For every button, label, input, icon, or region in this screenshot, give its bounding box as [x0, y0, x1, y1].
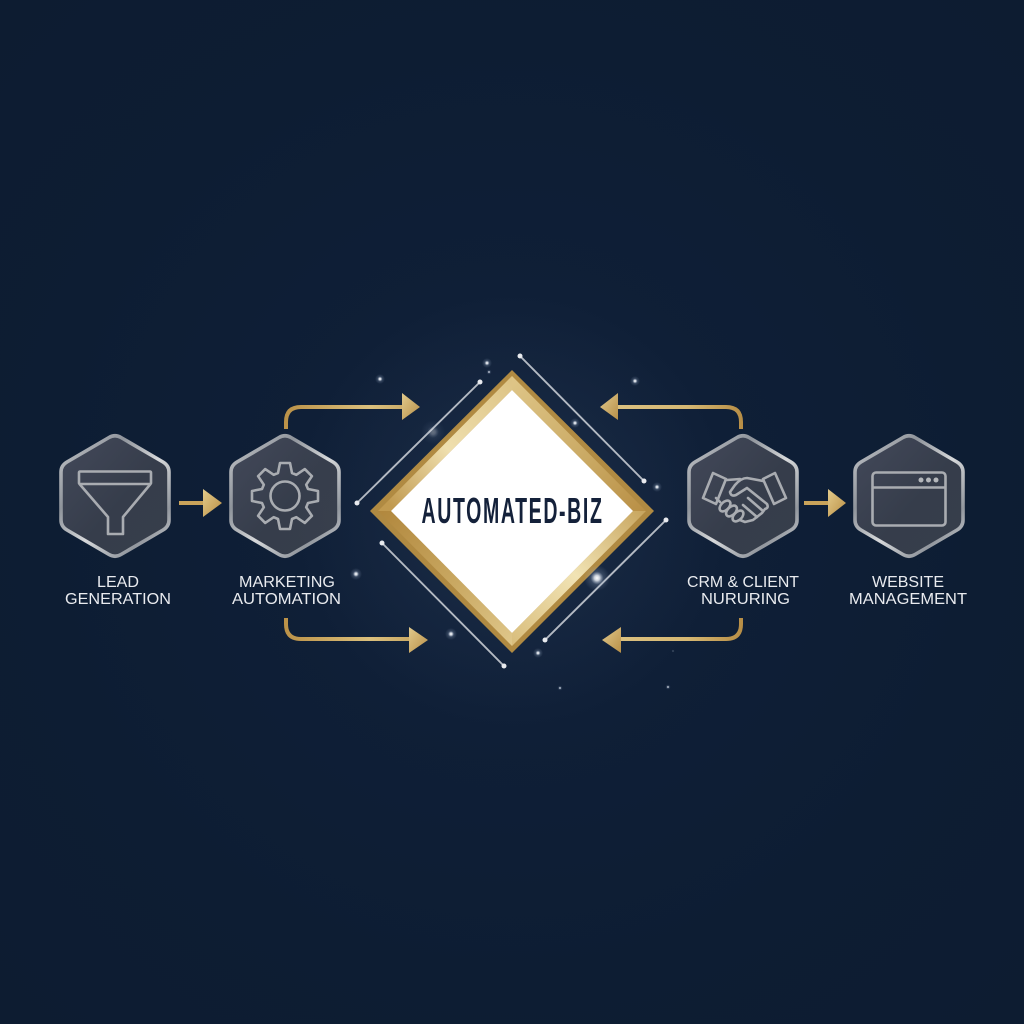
label: marketing automation: [232, 574, 341, 608]
title: AUTOMATED-BIZ: [422, 490, 604, 531]
sparkles: [350, 358, 674, 690]
diamond gold band: south-west: [378, 511, 512, 646]
arrow: crm to diamond, bottom: [602, 618, 741, 653]
step: website management: [849, 436, 967, 608]
icon: funnel: [79, 472, 151, 534]
diamond gold band: north-east: [512, 376, 646, 511]
diamond white face: [391, 390, 633, 633]
arrow: crm to website: [804, 489, 846, 517]
hexagon: lead generation: [61, 436, 169, 556]
connector lines around diamond: [354, 354, 668, 668]
step: marketing automation: [231, 436, 341, 608]
label: crm and client nurturing: NURURING: [701, 591, 790, 608]
hexagon: website: [855, 436, 963, 556]
diamond gold band: north-west: [378, 376, 512, 511]
label: crm and client nurturing: CRM & CLIENT: [687, 574, 799, 591]
step: crm and client nurturing: [687, 436, 799, 608]
icon: handshake: [703, 473, 786, 523]
label: lead generation: [65, 574, 171, 608]
central diamond: [370, 370, 654, 653]
label: website management: MANAGEMENT: [849, 591, 967, 608]
hexagon: crm: [689, 436, 797, 556]
hexagon: marketing automation: [231, 436, 339, 556]
arrow: lead to marketing: [179, 489, 222, 517]
icon: gear: [252, 463, 318, 529]
arrow: marketing to diamond, top: [286, 393, 420, 429]
label: lead generation: GENERATION: [65, 591, 171, 608]
label: lead generation: LEAD: [97, 574, 139, 591]
step: lead generation: [61, 436, 171, 608]
label: website management: WEBSITE: [872, 574, 944, 591]
icon: browser window: [872, 472, 946, 526]
arrow: marketing to diamond, bottom: [286, 618, 428, 653]
glow behind diamond: [292, 291, 732, 731]
diamond gold band: south-east: [512, 511, 646, 646]
diamond outer edge: [370, 370, 654, 653]
label: marketing automation: AUTOMATION: [232, 591, 341, 608]
label: website management: [849, 574, 967, 608]
label: crm and client nurturing: [687, 574, 799, 608]
label: marketing automation: MARKETING: [239, 574, 335, 591]
arrow: crm to diamond, top: [600, 393, 741, 429]
